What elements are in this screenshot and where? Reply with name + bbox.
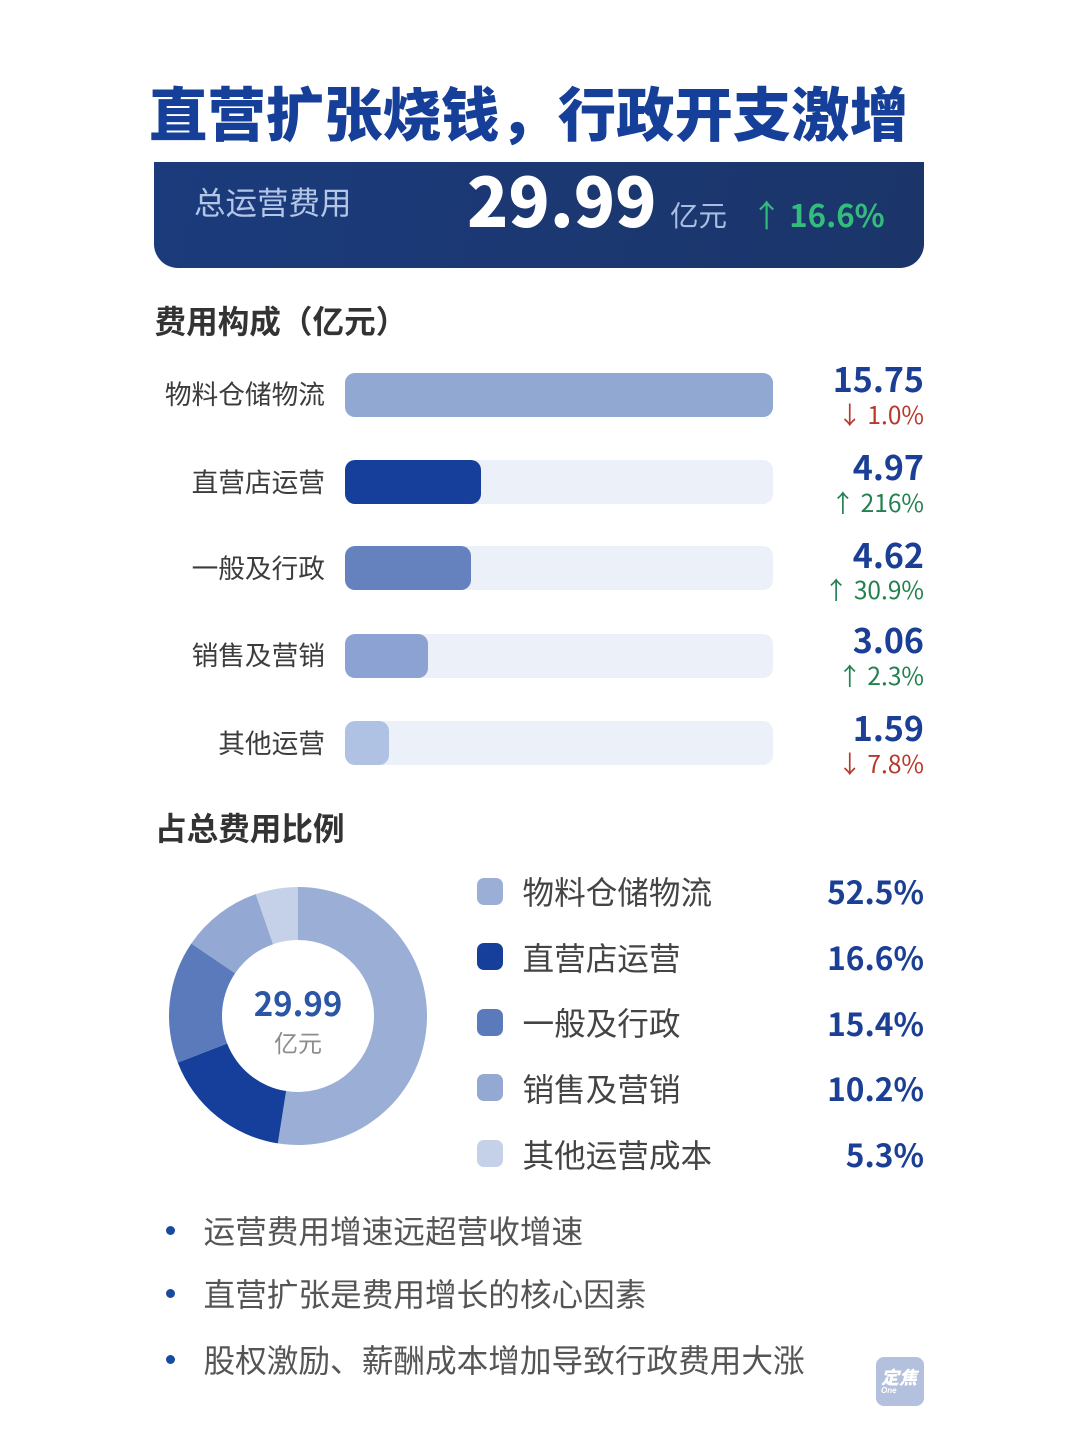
bar row: sales and marketing bbox=[192, 614, 924, 692]
label: 物料仓储物流 bbox=[165, 373, 325, 412]
legend row: direct stores bbox=[477, 934, 924, 980]
swatch bbox=[477, 1140, 503, 1167]
bullet point 1: 运营费用增速远超营收增速 bbox=[204, 1207, 583, 1253]
segment: sales and marketing bbox=[191, 894, 273, 973]
legend label: 物料仓储物流 bbox=[522, 868, 712, 914]
legend label: 一般及行政 bbox=[522, 999, 680, 1045]
bar bbox=[345, 373, 773, 417]
change: ↑ 216% bbox=[831, 484, 924, 520]
legend row: general and admin bbox=[477, 999, 924, 1046]
logo subtitle: One bbox=[881, 1386, 897, 1395]
logo name: 定焦 bbox=[881, 1364, 917, 1390]
bar row: general and admin bbox=[192, 529, 924, 607]
heading: cost structure: 费用构成（亿元） bbox=[154, 297, 407, 343]
label: 一般及行政 bbox=[192, 547, 325, 586]
label: 直营店运营 bbox=[192, 461, 325, 500]
segment: direct stores bbox=[178, 1043, 286, 1143]
legend value: 16.6% bbox=[827, 934, 924, 980]
value: 4.62 bbox=[853, 529, 924, 578]
swatch bbox=[477, 878, 503, 905]
legend value: 52.5% bbox=[827, 868, 924, 914]
donut chart bbox=[169, 887, 427, 1145]
legend value: 15.4% bbox=[827, 1000, 924, 1046]
bar row: materials and logistics bbox=[165, 353, 924, 432]
donut centre value: 29.99 bbox=[254, 978, 342, 1026]
label: 其他运营 bbox=[218, 722, 325, 761]
logo badge bbox=[876, 1357, 924, 1406]
change: ↑ 2.3% bbox=[837, 658, 924, 692]
legend label: 销售及营销 bbox=[522, 1065, 680, 1111]
change: ↑ 30.9% bbox=[824, 572, 924, 607]
swatch bbox=[477, 943, 503, 970]
total unit: 亿元 bbox=[670, 194, 727, 235]
value: 3.06 bbox=[853, 614, 924, 663]
bullet point 2: 直营扩张是费用增长的核心因素 bbox=[204, 1270, 646, 1316]
title: 直营扩张烧钱，行政开支激增 bbox=[149, 68, 908, 153]
value: 4.97 bbox=[853, 441, 924, 490]
swatch bbox=[477, 1074, 503, 1101]
value: 1.59 bbox=[853, 702, 924, 751]
bar bbox=[345, 546, 773, 590]
bar row: direct stores bbox=[192, 441, 924, 520]
bullet point 3: 股权激励、薪酬成本增加导致行政费用大涨 bbox=[204, 1336, 805, 1382]
total growth: ↑ 16.6% bbox=[751, 191, 885, 236]
legend row: other bbox=[477, 1131, 924, 1177]
panel: total operating cost bbox=[154, 162, 924, 268]
segment: other bbox=[256, 887, 298, 944]
total value: 29.99 bbox=[467, 148, 657, 247]
heading: share of total: 占总费用比例 bbox=[155, 804, 345, 850]
legend label: 直营店运营 bbox=[522, 934, 680, 980]
label: 销售及营销 bbox=[192, 634, 325, 673]
change: ↓ 1.0% bbox=[837, 397, 924, 432]
legend row: sales and marketing bbox=[477, 1065, 924, 1111]
bar row: other operations bbox=[218, 702, 924, 780]
legend value: 5.3% bbox=[846, 1131, 924, 1177]
bar bbox=[345, 634, 773, 678]
segment: general and admin bbox=[169, 943, 235, 1063]
donut centre unit: 亿元 bbox=[274, 1024, 322, 1059]
legend value: 10.2% bbox=[827, 1065, 924, 1111]
change: ↓ 7.8% bbox=[837, 746, 924, 780]
value: 15.75 bbox=[833, 353, 924, 402]
segment: materials and logistics bbox=[278, 887, 427, 1145]
legend label: 其他运营成本 bbox=[522, 1131, 712, 1177]
bar bbox=[345, 721, 773, 765]
swatch bbox=[477, 1009, 503, 1036]
total label: 总运营费用 bbox=[194, 178, 352, 224]
bar bbox=[345, 460, 773, 504]
legend row: materials and logistics bbox=[477, 868, 924, 914]
